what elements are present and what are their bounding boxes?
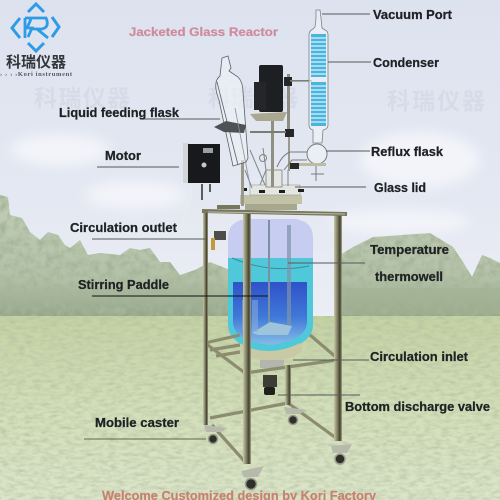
label: Glass lid: Glass lid [374,181,426,195]
label: Liquid feeding flask: Liquid feeding flask [59,106,179,120]
background: watermarks: 科瑞仪器 [34,85,130,111]
label: Mobile caster: Mobile caster [95,416,179,430]
glass lid [240,148,304,210]
background: watermarks: 科瑞仪器 [387,88,485,114]
label: Circulation inlet: Circulation inlet [370,350,469,364]
label: Circulation outlet: Circulation outlet [70,221,178,235]
casters [208,416,345,490]
circulation outlet valve [211,231,226,250]
background: sky [0,0,500,325]
icon: logo mark [12,4,59,51]
support stand [241,74,312,206]
bottom valve [260,360,284,395]
background: watermarks [34,85,485,114]
reflux flask [277,144,327,181]
background: tree line [0,190,500,318]
title: Jacketed Glass Reactor [129,27,279,39]
motor [250,65,287,121]
background: watermarks: 科瑞仪器 [208,85,298,111]
label: Reflux flask: Reflux flask [371,145,443,159]
liquid feeding flask [214,56,250,185]
logo [0,4,73,78]
control box [182,143,220,228]
label: Condenser: Condenser [373,56,439,70]
callout lines [84,14,371,439]
background: clouds [10,132,480,234]
vessel [228,219,313,361]
reactor illustration [182,10,352,490]
label: Bottom discharge valve: Bottom discharge valve [345,400,490,414]
label: Vacuum Port: Vacuum Port [373,8,453,22]
logo chinese name: 科瑞仪器 [6,53,66,71]
label: Temperature: Temperature [370,243,449,257]
steel frame [202,207,347,464]
logo english name: › › › ›Kori instrument [0,71,73,78]
label: Motor: Motor [105,149,141,163]
label: Stirring Paddle: Stirring Paddle [78,278,169,292]
label: thermowell: thermowell [375,270,443,284]
background: grass [0,316,500,500]
condenser [309,10,328,143]
